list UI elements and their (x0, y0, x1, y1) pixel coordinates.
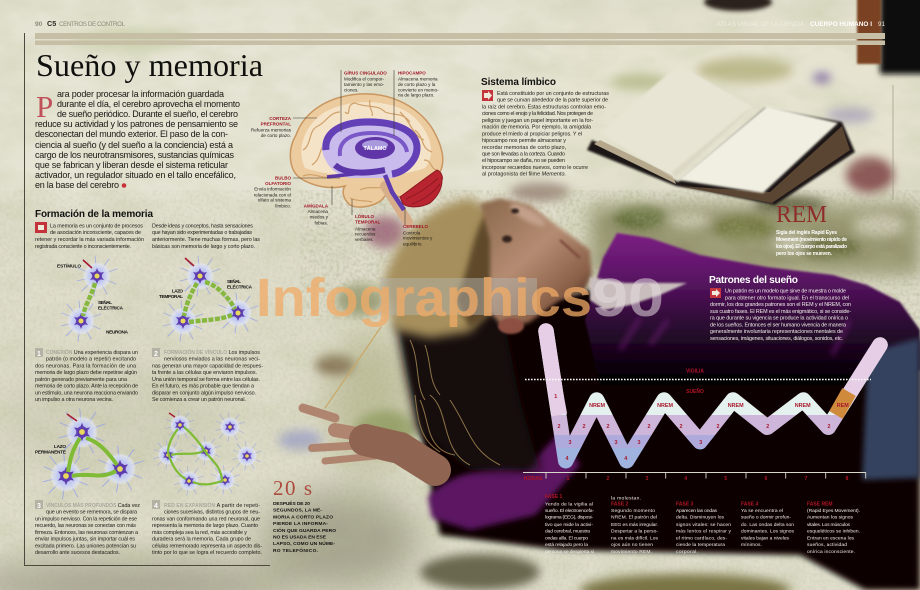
sistema límbico text: que se curvan alrededor de la parte superior de (497, 98, 608, 104)
memory intro text, column 1: registrada consciente o inconscientemente. (35, 244, 131, 250)
callout: 20 s: MORIA A CORTO PLAZO (273, 514, 333, 520)
phase REM text: onírica inconsciente. (807, 549, 855, 555)
hypnogram: stage labels: 3 (699, 440, 702, 446)
intro paragraph: activador, un regulador situado en el tallo encefálico, (35, 170, 236, 180)
step 3 text: vínculos más profundos: VÍNCULOS MÁS PROFUNDOS Cada vez (46, 501, 140, 509)
memory intro text, column 1: La memoria es un conjunto de procesos (50, 224, 143, 230)
hypnogram: time axis (523, 472, 866, 482)
sistema límbico text: la raíz del cerebro. Estas estructuras controlan emo- (482, 104, 606, 110)
hypnogram: stage labels: 2 (766, 424, 769, 430)
label: giro cingulado: tamiento y las emo- (344, 82, 385, 87)
sistema límbico text: peligros y juegan un papel importante en la for- (482, 118, 593, 124)
step 4 text: red en expansión: ciones sucesivas, distintos grupos de neu- (164, 510, 260, 516)
hypnogram: stage labels: 1 (554, 394, 557, 400)
header: left folio: CENTROS DE CONTROL (59, 21, 126, 28)
step 2 text: formación de vínculo: disparar en conjunto algún impulso nervioso. (152, 390, 256, 396)
background photo: girl's hand (303, 327, 435, 470)
label: giro cingulado: Modifica el compor- (344, 76, 385, 81)
phase REM text: esqueléticos se inhiben. (807, 529, 860, 535)
sistema límbico text: hipocampo nos permite almacenar y (482, 138, 566, 144)
hypnogram: sleep-stage curve (546, 331, 880, 461)
hypnogram: stage labels: NREM (728, 403, 744, 409)
header double rule (35, 33, 885, 45)
phase 3 text (676, 501, 732, 555)
label: corteza prefrontal: CORTEZA (269, 116, 292, 121)
phase 3 text: signos vitales: se hacen (676, 522, 731, 528)
label: hipocampo: ria de largo plazo. (398, 93, 435, 98)
phase 2 text: Despertar a la perso- (611, 529, 658, 535)
label: bulbo olfatorio: relacionada con el (254, 192, 291, 197)
hypnogram: stage labels: 3 (614, 440, 618, 446)
step 1 text: conexión: dos neuronas. Para la formación de una (35, 364, 136, 370)
hypnogram: stage labels: 3 (568, 440, 572, 446)
hypnogram: stage labels: NREM (589, 403, 605, 409)
hypnogram: stage labels: 2 (606, 424, 610, 430)
label: bulbo olfatorio: límbico. (275, 203, 291, 208)
phase REM text (807, 501, 860, 555)
intro paragraph: de sueño periódico. Durante el sueño, el cerebro (57, 109, 238, 119)
REM definition (776, 202, 847, 257)
step 3 text: vínculos más profundos: recuerdo, las neuronas se conectan con más (35, 523, 136, 529)
step 2 text: formación de vínculo (152, 348, 263, 403)
phase REM text: FASE REM (807, 501, 833, 507)
brain illustration (290, 94, 443, 222)
memory intro text, column 2 (152, 224, 260, 250)
step 2 text: formación de vínculo: 2 (154, 351, 158, 358)
patrones del sueño text: de los sueños. Entonces el ser humano vivencia de manera (710, 322, 846, 328)
patrones del sueño text: generalmente involuntaria representaciones mentales de (710, 329, 843, 335)
step 4 text: red en expansión: células rememorado representa un aspecto dis- (152, 544, 262, 550)
sistema límbico text: Está constituido por un conjunto de estructuras (497, 91, 609, 97)
diagram 2: temporal loop between three neurons: TEMPORAL (159, 294, 183, 299)
phase 1 text: sueño. El electroencefa- (545, 508, 594, 514)
step 1 text: conexión (35, 348, 138, 403)
label: amígdala: miedos y (310, 215, 329, 220)
label: hipocampo: convierte en memo- (398, 87, 439, 92)
step 4 text: red en expansión: 4 (154, 503, 158, 510)
memory intro text, column 1: de asociación inconsciente, capaces de (50, 230, 141, 236)
phase REM text: Aumentan los signos (807, 515, 854, 521)
intro paragraph: ara poder procesar la información guardada (57, 89, 224, 99)
diagram 4: expanding network (154, 411, 261, 495)
step 3 text: vínculos más profundos: 3 (37, 503, 41, 510)
hypnogram: stage labels: 2 (828, 424, 830, 430)
intro paragraph (35, 89, 240, 190)
hypnogram: stage labels: 3 (638, 440, 640, 446)
hypnogram: stage labels: 2 (680, 424, 682, 430)
watermark: 90 (592, 268, 664, 328)
phase REM text: (Rapid Eyes Movement). (807, 508, 860, 514)
hypnogram: time axis: 7 (805, 476, 808, 482)
hypnogram: time axis: 6 (765, 476, 768, 482)
phase 4 text: mínimos. (741, 542, 762, 548)
intro paragraph: P (36, 89, 53, 124)
label: bulbo olfatorio: Envía información (254, 187, 291, 192)
step 1 text: conexión: un estímulo, una neurona reacciona enviando (35, 390, 138, 396)
label: giro cingulado (344, 69, 387, 92)
background photo: open book (587, 65, 855, 205)
patrones del sueño text: Un patrón es un modelo que sirve de muestra o molde (725, 289, 846, 295)
hypnogram: time axis: 8 (846, 476, 849, 482)
label: hipocampo: de corto plazo y la (398, 82, 436, 87)
label: hipocampo (398, 71, 439, 98)
phase 2 text: EEG es más irregular. (611, 522, 658, 528)
patrones del sueño text (710, 289, 851, 342)
hypnogram: time axis: HORAS (524, 476, 543, 482)
diagram 2: temporal loop between three neurons (159, 256, 258, 341)
header: right folio: 91 (878, 21, 885, 28)
phase 1 text: Yendo de la vigilia al (545, 501, 593, 507)
sistema límbico text: que son llevadas a la corteza. Cuando (482, 152, 565, 158)
patrones del sueño text: ra que durante su vigencia se produce la actividad onírica o (710, 316, 848, 322)
background photo: hair (383, 198, 540, 470)
phase 4 text: vitales bajan a niveles (741, 536, 790, 542)
step 2 text: formación de vínculo: nas generan una mayor capacidad de respues- (152, 364, 263, 370)
label: cerebelo: equilibrio. (403, 241, 423, 246)
diagram 1: connection between two neurons: ESTÍMULO (57, 262, 81, 268)
phase 2 text: movimiento REM. (611, 549, 652, 555)
phase 1 text: tivo que mide la activi- (545, 522, 593, 528)
heading: Formación de la memoria: Formación de la memoria (35, 209, 153, 220)
step 4 text: red en expansión: tinto por lo que se logra el recuerdo completo. (152, 550, 262, 556)
phase 2 text: la molestan. (611, 496, 641, 502)
label: amígdala: AMÍGDALA (304, 202, 329, 209)
label: lóbulo temporal: TEMPORAL (355, 220, 380, 225)
label: corteza prefrontal: PREFRONTAL (261, 122, 291, 126)
phase 3 text: ciende la temperatura (676, 542, 725, 548)
step 4 text: red en expansión: duradera será la memoria. Cada grupo de (152, 537, 251, 543)
patrones del sueño text: sus cuatro fases. El REM es el más enigmático, si se conside- (710, 309, 851, 315)
icon: section arrow, memoria (35, 222, 47, 233)
intro paragraph: cargo de los neurotransmisores, sustancias químicas (35, 150, 234, 160)
hypnogram: stage labels: REM (837, 403, 849, 409)
hypnogram: time axis: 1 (567, 476, 570, 482)
step 4 text: red en expansión: más compleja sea la red, más accesible y (152, 530, 247, 536)
hypnogram: stage labels: 4 (624, 456, 627, 462)
background photo: furniture at top right (704, 0, 920, 74)
hypnogram: time axis: 3 (646, 476, 649, 482)
hypnogram: stage labels: 4 (566, 456, 568, 462)
phase 1 text (545, 494, 594, 555)
phase 2 text: FASE 2 (611, 501, 628, 507)
hypnogram: wake/sleep threshold: SUEÑO (686, 388, 704, 395)
patrones del sueño text: para obtener otro formato igual. En el transcurso del (725, 295, 849, 301)
step 3 text: vínculos más profundos: enviar impulsos juntas, sin importar cuál es (35, 537, 135, 543)
phase 2 text: NREM. El patrón del (611, 515, 657, 521)
intro paragraph: desconectan del mundo exterior. El paso de la con- (35, 129, 228, 139)
diagram 1: connection between two neurons: ELÉCTRICA (98, 304, 124, 310)
callout: 20 s (273, 476, 336, 554)
background photo: girl's clothing and dark body (402, 233, 920, 590)
phase 3 text: corporal. (676, 549, 698, 555)
label: bulbo olfatorio: OLFATORIO (265, 181, 291, 186)
step 1 text: conexión: patrón generado previamente para una (35, 377, 127, 383)
heading: Sistema límbico: Sistema límbico (481, 77, 556, 88)
sistema límbico text: mación de memoria. Por ejemplo, la amígdala (482, 124, 591, 130)
watermark: Infographics (256, 268, 592, 328)
hypnogram: stage labels: 2 (558, 424, 560, 430)
label: cerebelo: CEREBELO (403, 224, 429, 229)
REM definition: pero los ojos se mueven. (776, 251, 833, 257)
hypnogram: stage labels: 2 (582, 424, 586, 430)
diagram 3: permanent loop: PERMANENTE (35, 450, 66, 454)
header: left folio: C5 (47, 19, 56, 28)
phase 2 text: na es más difícil. Los (611, 536, 659, 542)
diagram 3: permanent loop (35, 409, 143, 499)
step 1 text: conexión: un impulso a otra neurona vecina. (35, 397, 113, 403)
REM definition: Movement (movimiento rápido de (776, 237, 847, 243)
label: giro cingulado: ciones. (344, 87, 359, 92)
sistema límbico text: el hipocampo se daña, no se pueden (482, 158, 565, 164)
callout: 20 s: DESPUÉS DE 20 (273, 499, 310, 507)
phase 4 text: dominantes. Los signos (741, 529, 795, 535)
label: cerebelo: Controla (403, 230, 421, 235)
sistema límbico text: produce el miedo al propiciar peligros. Y el (482, 131, 582, 137)
hypnogram: time axis: 2 (607, 476, 610, 482)
patrones del sueño text: dormir, los dos grandes patrones son el REM y el NREM, con (710, 302, 851, 308)
callout: 20 s: LAPSO, COMO UN NÚME- (273, 540, 335, 547)
phase 1 text: está relajado pero la (545, 542, 588, 548)
header: right folio: ATLAS VISUAL DE LA CIENCIA (717, 21, 805, 28)
phase 1 text: persona se despierta si (545, 549, 594, 555)
step 4 text: red en expansión (152, 500, 262, 556)
REM definition: REM (776, 202, 827, 228)
diagram 2: temporal loop between three neurons: LAZO (172, 288, 183, 294)
step 2 text: formación de vínculo: ta frente a las células que enviaron impulsos. (152, 370, 257, 376)
title: Sueño y memoria (36, 47, 263, 83)
header: right folio: CUERPO HUMANO I (810, 21, 872, 28)
brain leader lines (293, 70, 405, 225)
label: hipocampo: Almacena memoria (398, 76, 438, 81)
step 1 text: conexión: CONEXIÓN Una experiencia dispara un (46, 348, 138, 356)
hypnogram: stage labels: 2 (648, 424, 650, 430)
heading: Patrones del sueño: Patrones del sueño (709, 275, 798, 286)
step 2 text: formación de vínculo: nerviosos enviados a las neuronas veci- (164, 357, 260, 363)
step 3 text: vínculos más profundos: firmeza. Entonces, las neuronas comienzan a (35, 530, 138, 536)
header: right folio (717, 21, 885, 28)
diagram 2: temporal loop between three neurons: ELÉCTRICA (227, 282, 253, 290)
sistema límbico text: ciones como el enojo y la felicidad. Nos protegen de (482, 111, 593, 117)
phase 3 text: más lentos el respirar y (676, 529, 732, 535)
step 1 text: conexión: patrón (o modelo a repetir) excitando (46, 357, 136, 363)
sistema límbico text (482, 91, 609, 178)
label: amígdala: fobias. (314, 220, 328, 225)
hypnogram: time axis: 5 (724, 476, 727, 482)
intro paragraph: ciencia al sueño (y del sueño a la conciencia) está a (35, 140, 233, 150)
step 1 text: conexión: memoria de corto plazo. Ante la recepción de (35, 384, 138, 390)
label: corteza prefrontal (251, 116, 292, 138)
label: bulbo olfatorio: BULBO (275, 176, 291, 180)
step 1 text: conexión: 1 (37, 351, 41, 358)
label: giro cingulado: GÍRUS CINGULADO (344, 69, 387, 76)
hypnogram: stage labels: NREM (795, 403, 811, 409)
phase REM text: vitales. Los músculos (807, 522, 851, 528)
label: cerebelo (403, 224, 433, 246)
memory intro text, column 1 (35, 224, 144, 250)
step 3 text: vínculos más profundos: que un evento se rememora, se dispara (46, 510, 137, 516)
label: lóbulo temporal: recuerdos (355, 231, 376, 236)
label: lóbulo temporal (355, 212, 380, 242)
label: lóbulo temporal: LÓBULO (355, 212, 374, 219)
label: amígdala (304, 202, 329, 225)
hypnogram: stage labels (554, 394, 849, 462)
phase 4 text: FASE 4 (741, 501, 758, 507)
icon: section arrow, patrones (710, 288, 721, 298)
phase 3 text: FASE 3 (676, 501, 693, 507)
step 2 text: formación de vínculo: En el futuro, es más probable que tiendan a (152, 384, 254, 390)
diagram 1: connection between two neurons (57, 256, 129, 341)
step 4 text: red en expansión: representa la memoria de largo plazo. Cuanto (152, 523, 258, 529)
phase 3 text: el ritmo cardíaco, des- (676, 536, 727, 542)
diagram 3: permanent loop: LAZO (54, 444, 66, 449)
header: left folio: 90 (35, 21, 43, 28)
step 3 text: vínculos más profundos: excitada primero. Las uniones potencian su (35, 544, 136, 550)
REM definition: Sigla del inglés Rapid Eyes (776, 230, 837, 236)
phase REM text: Entran en escena los (807, 536, 855, 542)
callout: 20 s: RO TELEFÓNICO. (273, 546, 319, 554)
phase 1 text: dad cerebral, muestra (545, 529, 590, 535)
hypnogram: stage labels: 2 (716, 424, 720, 430)
diagram 1: connection between two neurons: SEÑAL (98, 299, 112, 305)
callout: 20 s: SEGUNDOS, LA ME- (273, 508, 322, 514)
brain illustration: TÁLAMO (363, 145, 387, 152)
intro paragraph: durante el día, el cerebro aprovecha el momento (57, 99, 240, 109)
label: hipocampo: HIPOCAMPO (398, 71, 426, 76)
phase 4 text: sueño o dormir profun- (741, 515, 791, 521)
memory intro text, column 2: Desde ideas y conceptos, hasta sensaciones (152, 224, 253, 230)
hypnogram: wake/sleep threshold (525, 369, 871, 395)
intro paragraph: reduce su actividad y los patrones de pensamiento se (35, 119, 238, 129)
step 3 text: vínculos más profundos: un impulso nervioso. Con la repetición de ese (35, 516, 137, 522)
intro paragraph: que se fabrican y liberan desde el sistema reticular (35, 160, 228, 170)
label: cerebelo: movimientos y (403, 236, 433, 241)
label: lóbulo temporal: Almacena (355, 226, 376, 231)
diagram 2: temporal loop between three neurons: SEÑAL (227, 278, 241, 284)
memory intro text, column 1: retener y recordar la más variada información (35, 237, 144, 243)
patrones del sueño text: sensaciones, imágenes, situaciones, diálogos, sonidos, etc. (710, 336, 843, 342)
memory intro text, column 2: básicas son memoria de largo y corto plazo. (152, 244, 255, 250)
header: left folio (35, 19, 126, 28)
background photo: girl's face and lace collar (480, 198, 687, 334)
callout: 20 s: 20 s (273, 476, 312, 500)
phase 1 text: FASE 1 (545, 494, 562, 500)
sistema límbico text: recordar memorias de corto plazo, (482, 145, 566, 151)
memory intro text, column 2: anteriormente. Tiene muchas formas, pero las (152, 237, 260, 243)
label: corteza prefrontal: de corto plazo. (261, 133, 291, 138)
label: bulbo olfatorio (254, 176, 291, 208)
hypnogram: stage labels: NREM (657, 403, 673, 409)
hypnogram: wake/sleep threshold: VIGILIA (686, 369, 704, 375)
phase 1 text: lograma (EEG), disposi- (545, 515, 593, 521)
phase 2 text: Segundo momento (611, 508, 655, 514)
label: corteza prefrontal: Refuerza memorias (251, 128, 292, 132)
step 3 text: vínculos más profundos: desarrollo ante sucesos destacados. (35, 550, 120, 556)
phase 3 text: delta. Disminuyen los (676, 515, 725, 521)
diagram 1: connection between two neurons: NEURONA (106, 330, 129, 334)
sistema límbico text: incorporar recuerdos nuevos, como le ocurre (482, 165, 588, 171)
phase 4 text: Ya se encuentra el (741, 508, 783, 514)
phase 2 text: ojos aún no tienen (611, 542, 653, 548)
phase 4 text (741, 501, 795, 548)
memory intro text, column 2: que hayan sido experimentadas o trabajadas (152, 230, 252, 236)
phase 4 text: do. Las ondas delta son (741, 522, 794, 528)
phase 3 text: Aparecen las ondas (676, 508, 718, 514)
REM definition: los ojos). El cuerpo está paralizado (776, 244, 847, 250)
intro paragraph: en la base del cerebro (35, 180, 119, 190)
step 4 text: red en expansión: ronas van conformando una red neuronal, que (152, 516, 260, 522)
phase 1 text: ondas alfa. El cuerpo (545, 536, 588, 542)
step 4 text: red en expansión: RED EN EXPANSIÓN A partir de repeti- (164, 501, 260, 509)
label: lóbulo temporal: verbales. (355, 237, 374, 242)
step 2 text: formación de vínculo: FORMACIÓN DE VÍNCULO Los impulsos (164, 348, 260, 356)
phase REM text: sueños, actividad (807, 542, 847, 548)
step 2 text: formación de vínculo: Se comienza a crear un patrón neuronal. (152, 397, 246, 403)
sistema límbico text: al protagonista del filme Memento. (482, 172, 566, 178)
step 3 text: vínculos más profundos (35, 500, 140, 556)
label: bulbo olfatorio: olfato al sistema (258, 198, 291, 203)
callout: 20 s: CIÓN QUE GUARDA PERO (273, 526, 336, 534)
icon: section arrow, sistema límbico (482, 90, 493, 101)
label: amígdala: Almacena (308, 209, 328, 214)
callout: 20 s: PIERDE LA INFORMA- (273, 521, 328, 527)
phase 2 text (611, 496, 659, 555)
step 1 text: conexión: memoria de largo plazo debe repetirse algún (35, 370, 137, 376)
callout: 20 s: NO ES USADA EN ESE (273, 534, 327, 540)
step 2 text: formación de vínculo: Una unión temporal se forma entre las células. (152, 377, 260, 383)
hypnogram: time axis: 4 (684, 476, 687, 482)
